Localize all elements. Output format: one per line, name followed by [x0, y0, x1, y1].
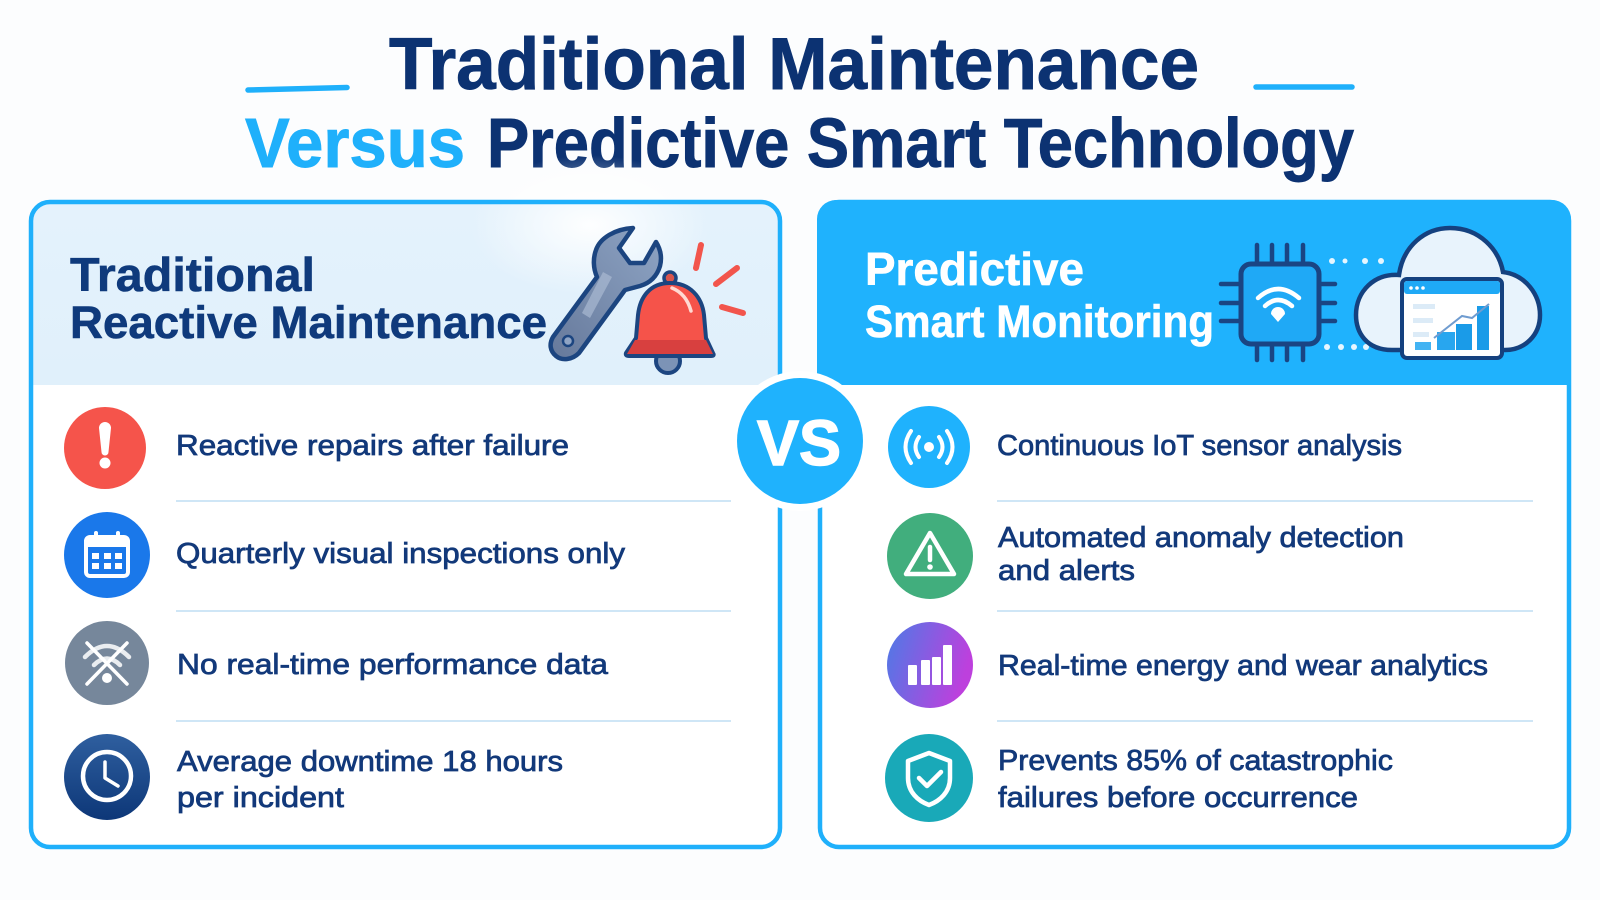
- icon: no wifi: [65, 621, 149, 705]
- row: reactive repairs: [64, 407, 569, 489]
- title line two: Versus: [245, 104, 465, 182]
- text: anomaly detection: and alerts: [998, 555, 1135, 587]
- row: anomaly detection: [887, 513, 1404, 599]
- text: prevents failures: failures before occurrence: [998, 782, 1358, 814]
- row: iot sensor: Continuous IoT sensor analysis: [997, 430, 1402, 462]
- title line one: Traditional Maintenance: [389, 24, 1199, 105]
- icon: bar analytics: [887, 622, 973, 708]
- text: average downtime: [177, 746, 563, 814]
- icon: shield check: [885, 734, 973, 822]
- text: anomaly detection: [998, 522, 1404, 587]
- text: prevents failures: [998, 745, 1393, 814]
- row: quarterly inspections: [64, 512, 626, 598]
- icon: alarm bell: [626, 245, 743, 373]
- left rows: [64, 407, 731, 820]
- row: energy analytics: Real-time energy and wear analytics: [998, 650, 1488, 682]
- right panel header: [817, 200, 1571, 385]
- text: average downtime: Average downtime 18 hours: [177, 746, 563, 778]
- left panel heading: Traditional: [70, 248, 315, 301]
- title line two: Predictive Smart Technology: [487, 104, 1354, 182]
- row: no real-time data: [65, 621, 608, 705]
- right panel heading: Predictive: [865, 243, 1084, 295]
- icon: wrench: [551, 228, 661, 359]
- icon: exclamation: [64, 407, 146, 489]
- row: prevents failures: [885, 734, 1393, 822]
- title: [245, 24, 1354, 182]
- left panel heading: Reactive Maintenance: [70, 297, 547, 348]
- icon: calendar: [64, 512, 150, 598]
- row: iot sensor: [888, 406, 1402, 488]
- icon: broadcast sensor: [888, 406, 970, 488]
- icon: clock: [64, 734, 150, 820]
- text: average downtime: per incident: [177, 782, 344, 814]
- row: average downtime: [64, 734, 563, 820]
- vs badge: VS: [757, 407, 841, 479]
- row: reactive repairs: Reactive repairs after failure: [176, 430, 569, 462]
- left panel header: [33, 155, 778, 385]
- row: quarterly inspections: Quarterly visual inspections only: [176, 538, 626, 570]
- right panel heading: Smart Monitoring: [865, 296, 1214, 347]
- icon: warning triangle: [887, 513, 973, 599]
- right rows: [885, 406, 1533, 822]
- panel: traditional reactive maintenance: [31, 155, 780, 847]
- row: no real-time data: No real-time performance data: [177, 649, 608, 681]
- vs badge: [730, 371, 870, 511]
- icon: data dots: [1324, 258, 1384, 350]
- icon: iot chip: [1221, 245, 1335, 360]
- panel: predictive smart monitoring: [817, 200, 1571, 847]
- left panel heading: [70, 248, 547, 348]
- right panel heading: [865, 243, 1214, 347]
- icon: cloud dashboard: [1356, 228, 1540, 358]
- text: prevents failures: Prevents 85% of catastrophic: [998, 745, 1393, 777]
- text: anomaly detection: Automated anomaly detection: [998, 522, 1404, 554]
- row: energy analytics: [887, 622, 1488, 708]
